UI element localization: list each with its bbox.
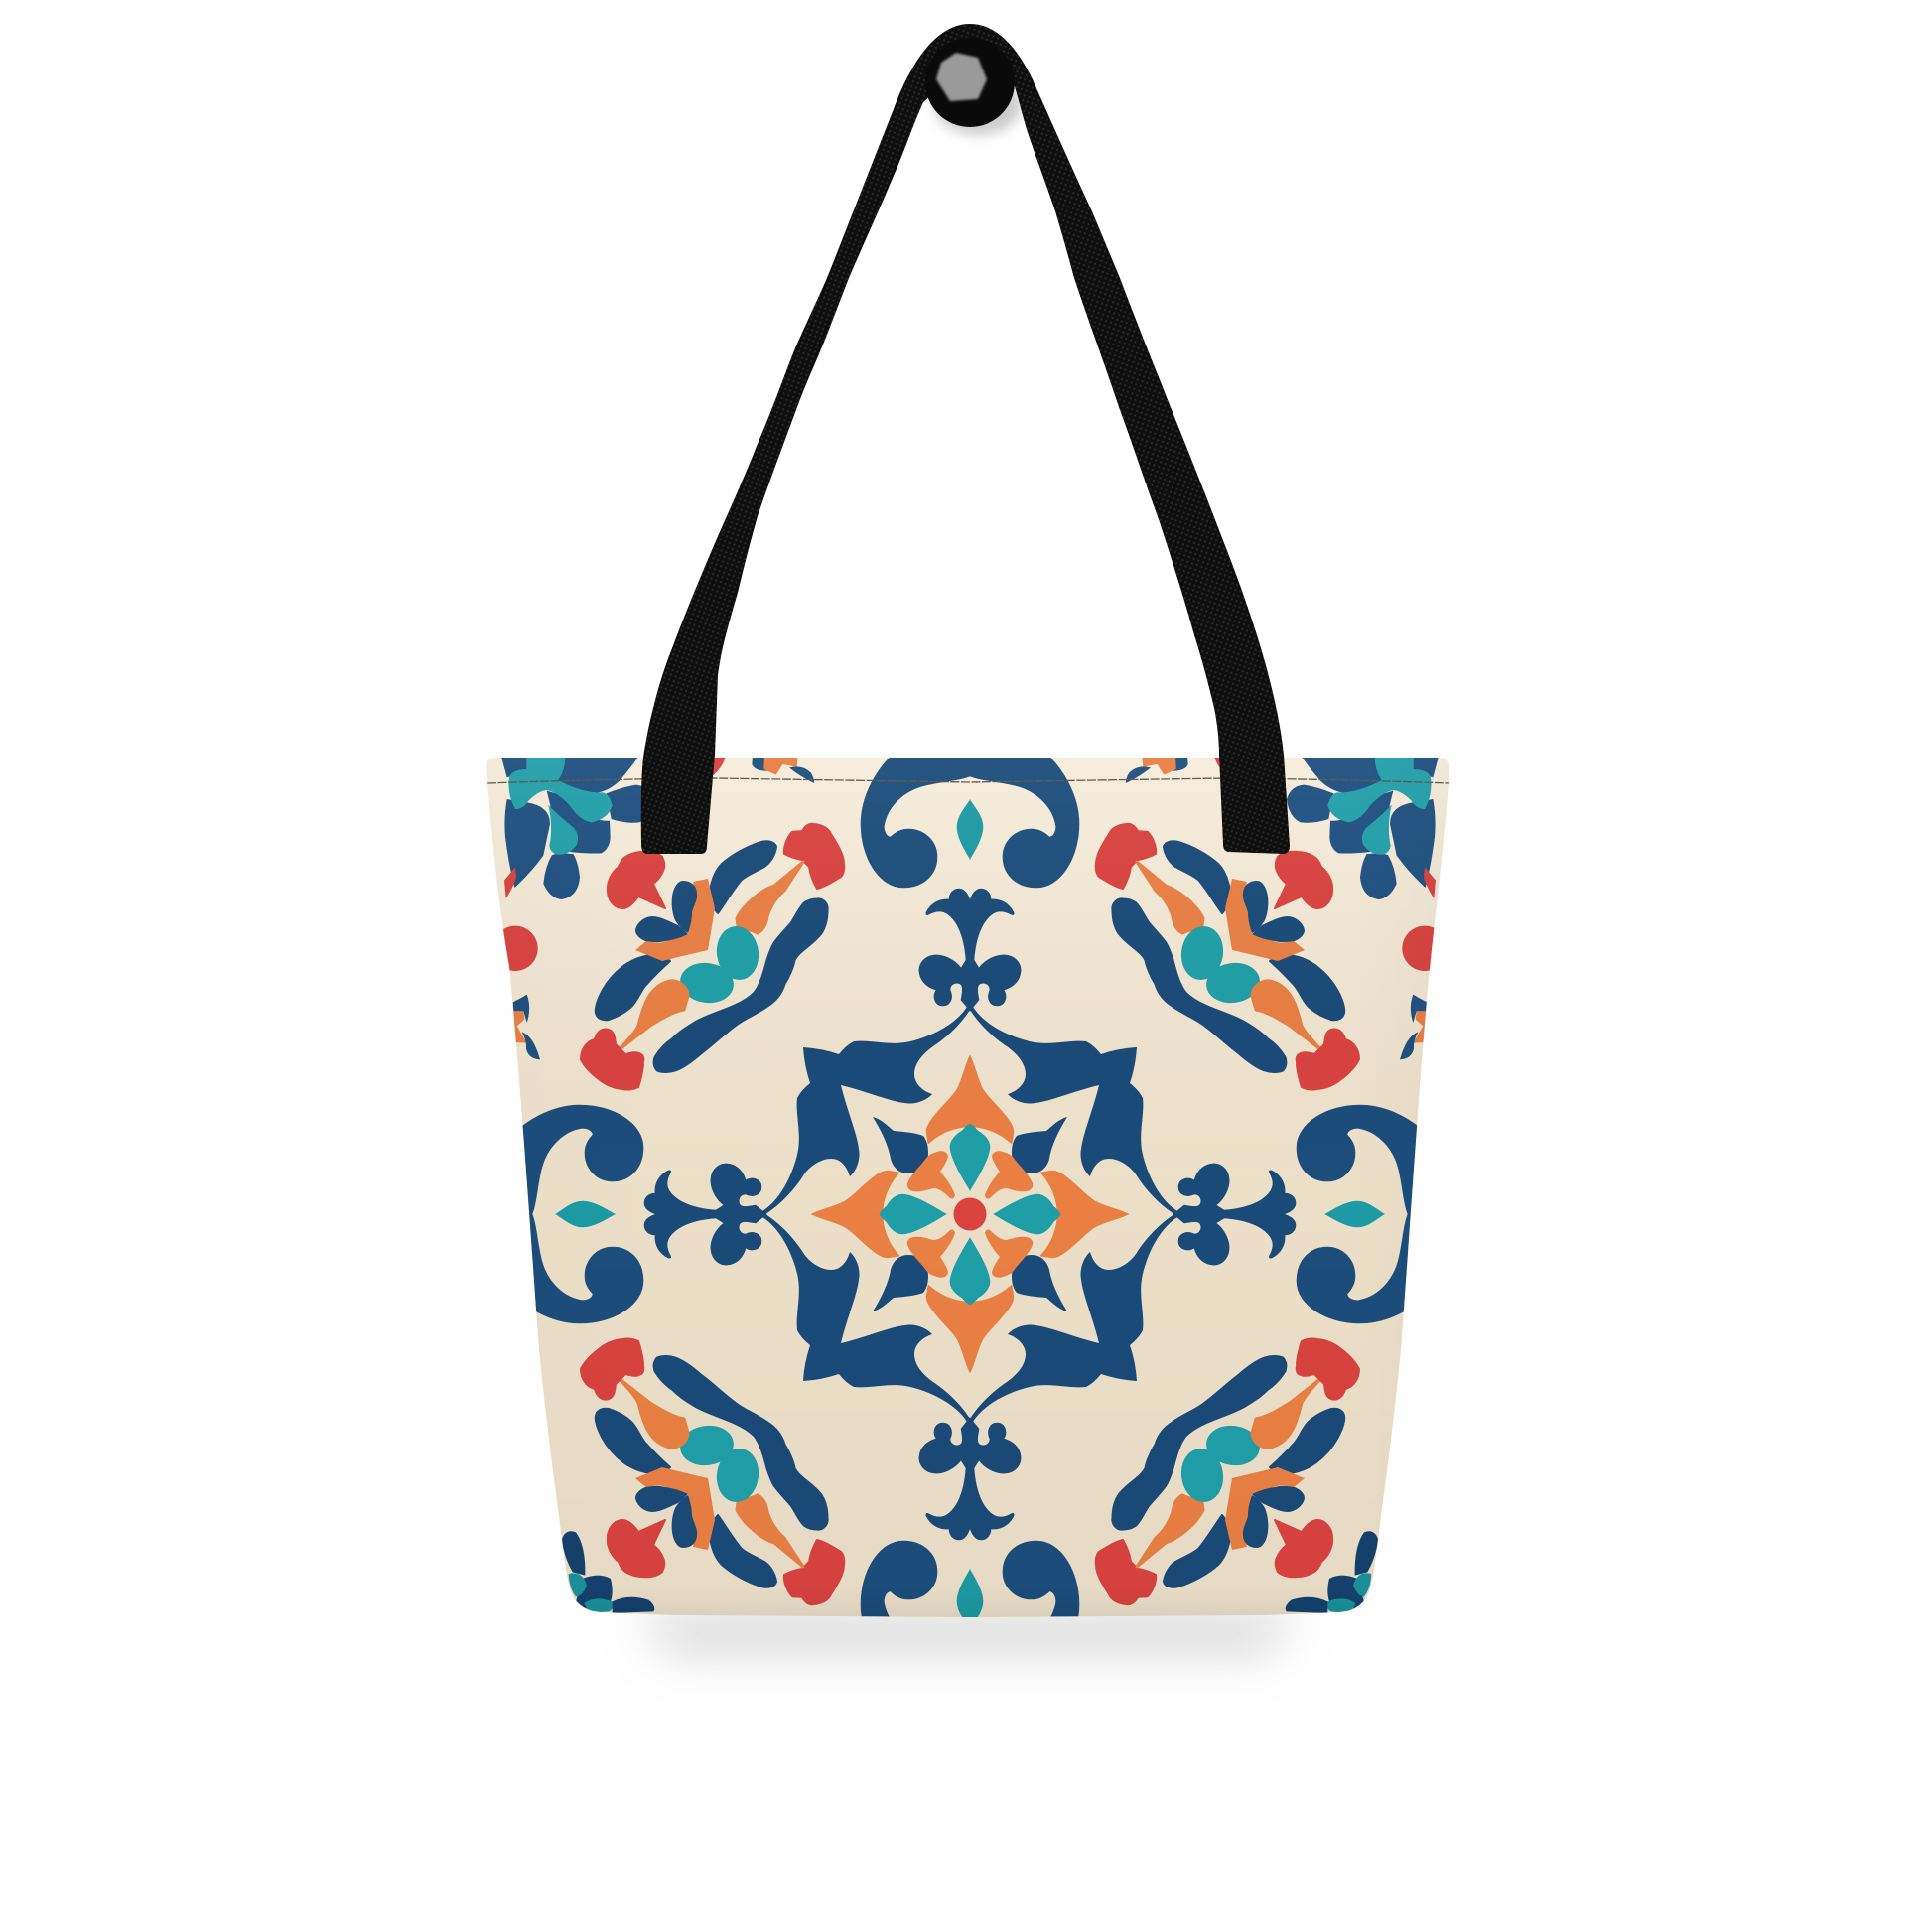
product scene: tote bag on peg bbox=[486, 24, 1449, 1672]
quadrant ornaments: medallion frame and diagonal bouquets bbox=[581, 824, 1359, 1604]
bag body with tile pattern bbox=[486, 758, 1449, 1617]
black strap handle looping over the peg bbox=[641, 24, 1290, 854]
top corner motifs bbox=[492, 753, 1448, 1059]
top hem stitching bbox=[487, 778, 1449, 783]
axis ornaments: stems, scrolls, petals bbox=[503, 748, 1437, 1681]
fabric shading bbox=[477, 750, 1469, 1623]
bottom corner motifs bbox=[562, 1531, 1378, 1615]
tile pattern centred on the bag bbox=[492, 748, 1448, 1681]
wall shadow under the bag bbox=[635, 1613, 1301, 1653]
peg grey hexagon head bbox=[936, 53, 987, 101]
wall peg bbox=[925, 38, 1015, 127]
medallion red centre bbox=[953, 1197, 987, 1231]
peg shadow bbox=[934, 75, 1022, 135]
bag fabric background bbox=[477, 750, 1469, 1623]
